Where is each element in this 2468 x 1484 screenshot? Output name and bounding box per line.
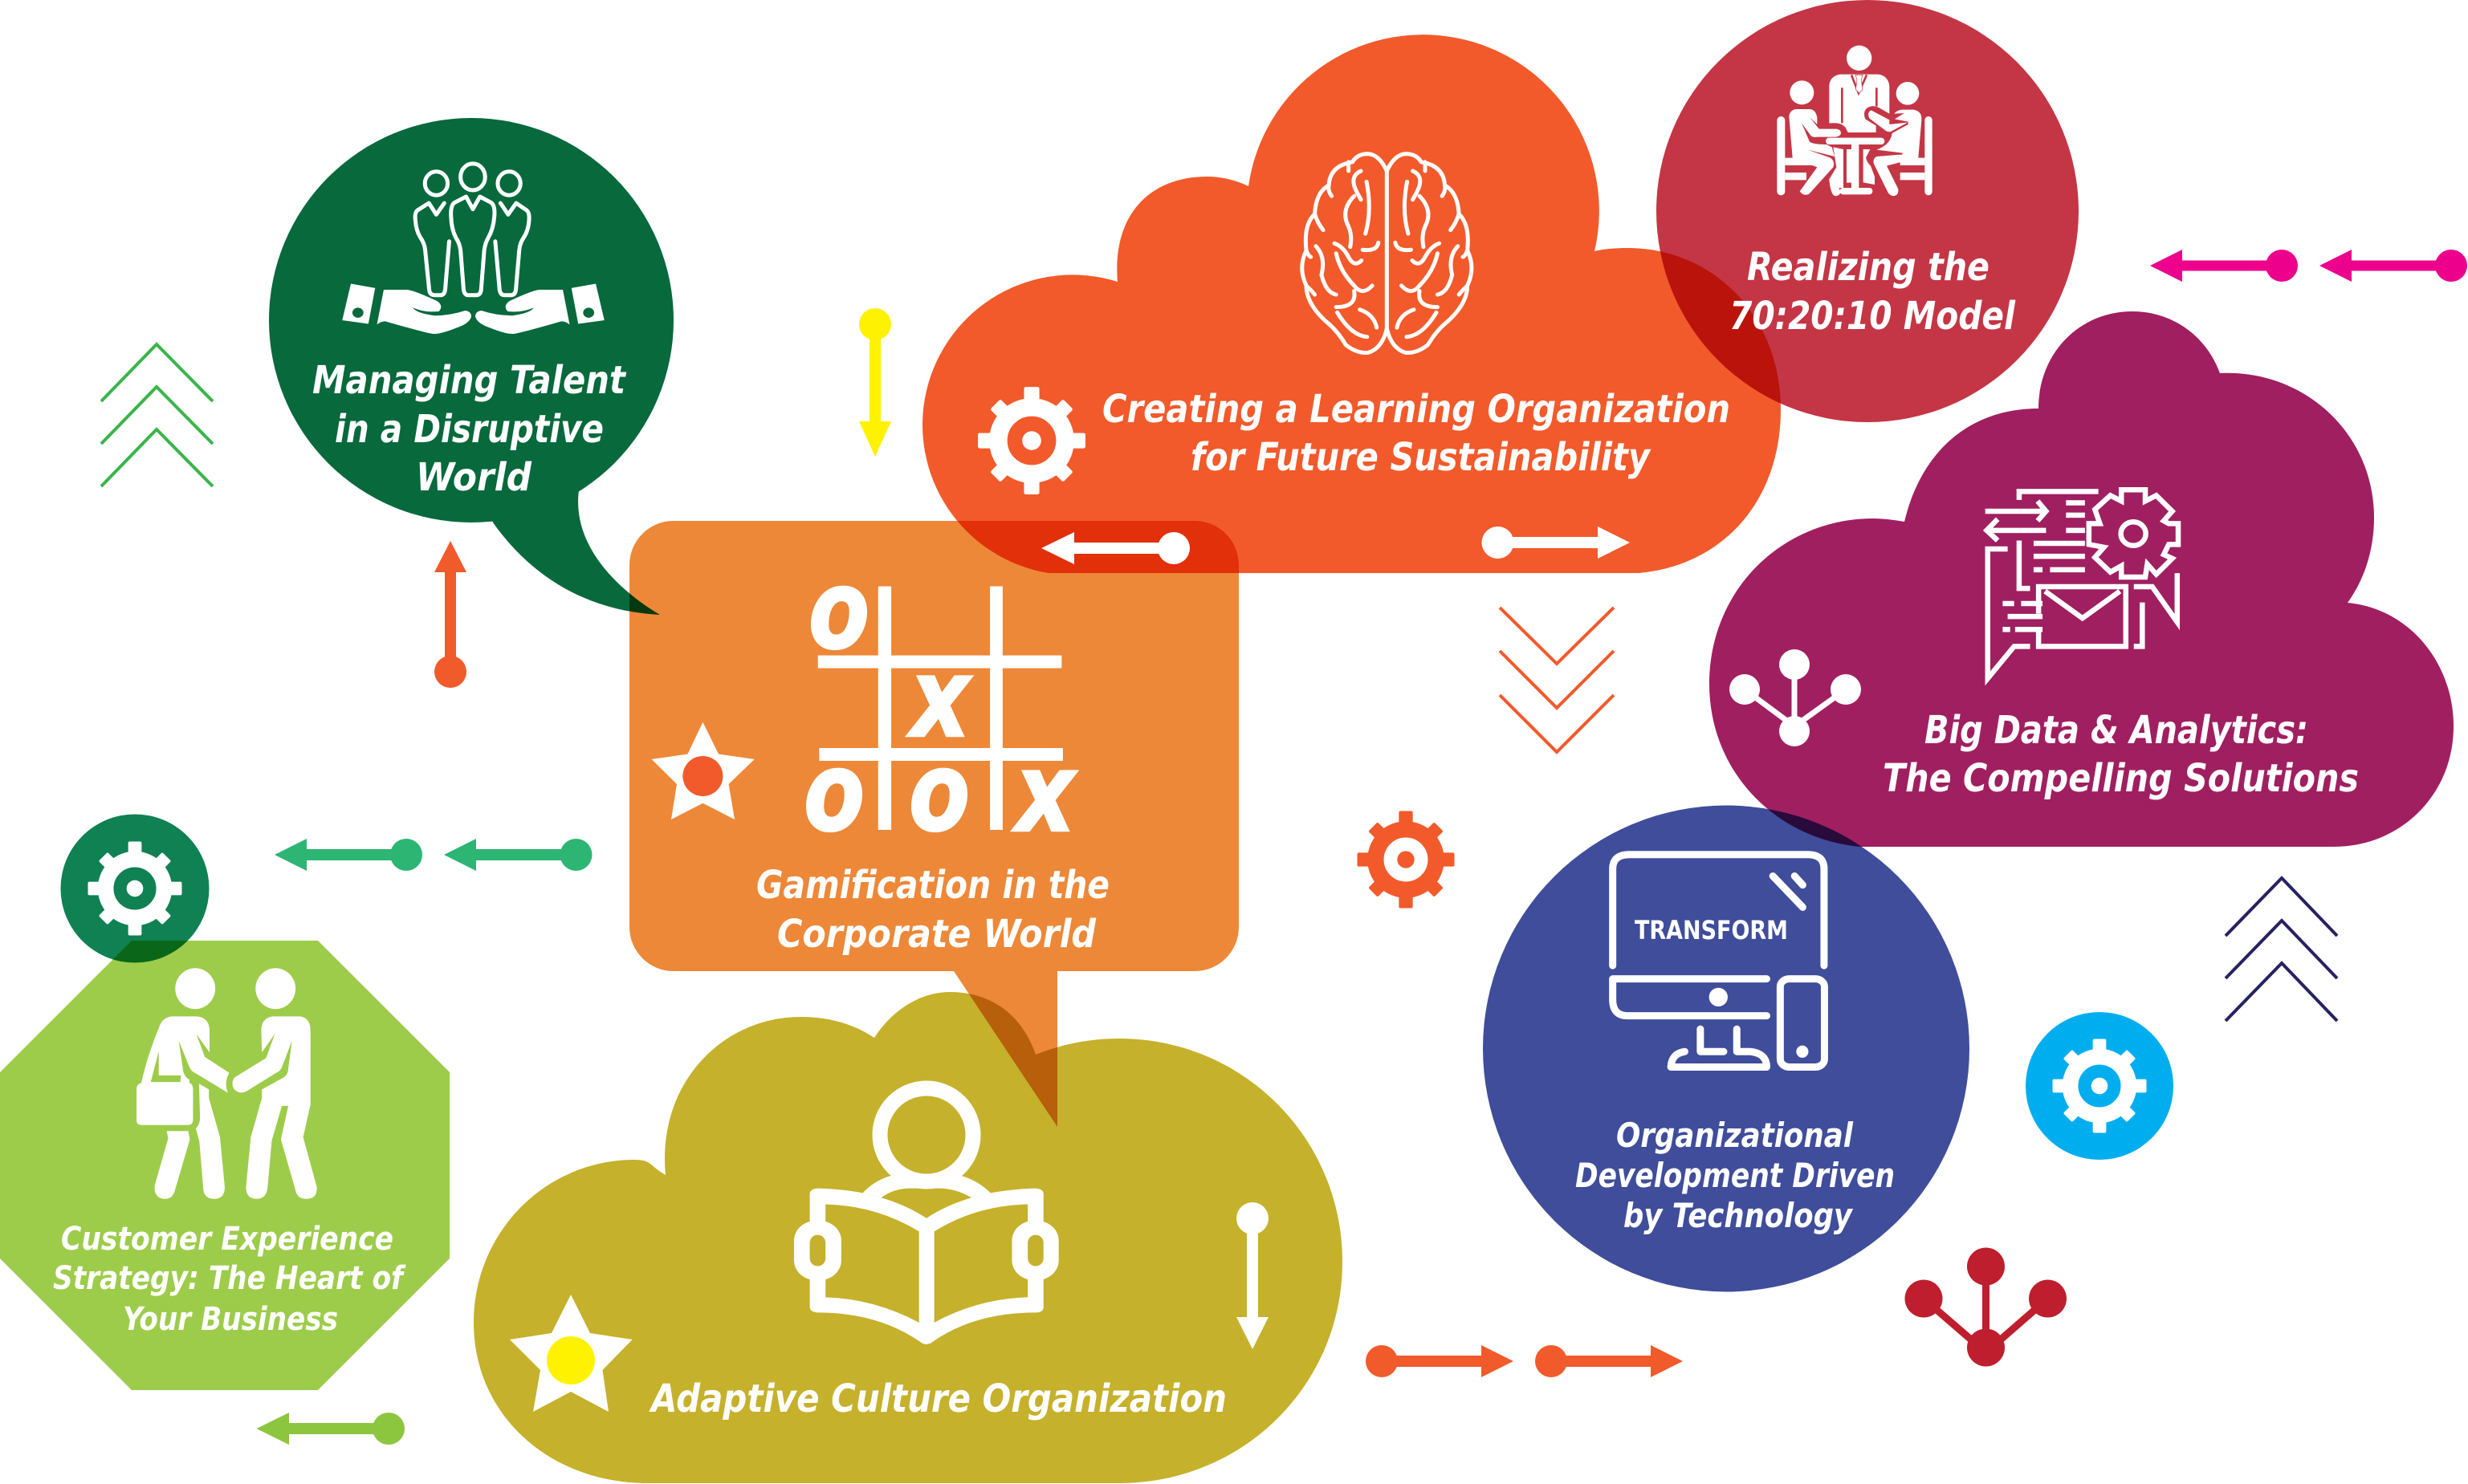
icon: data envelope gear: [1985, 490, 2178, 678]
icon: white network: [1729, 649, 1861, 746]
arrow: magenta left 1: [2150, 250, 2298, 282]
shape: purple cloud: [1709, 311, 2454, 847]
shape: orange speech box: [629, 521, 1239, 1127]
text: 70:20:10 heading: 70:20:10 Model: [1729, 294, 2015, 339]
text: managing talent heading: [312, 358, 627, 500]
shape: crimson circle: [1656, 0, 2079, 422]
icon: person reading book: [794, 1088, 1059, 1344]
text: technology heading: Organizational: [1616, 1116, 1854, 1155]
text: gamification heading: Corporate World: [777, 912, 1097, 957]
text: 70:20:10 heading: [1729, 245, 2015, 339]
chevrons: orange down: [1500, 608, 1614, 752]
text: big data heading: Big Data & Analytics:: [1924, 708, 2308, 753]
icon: gear on cyan circle: [2052, 1039, 2147, 1133]
text: customer experience heading: Your Business: [123, 1301, 338, 1338]
panel: technology: [1575, 855, 1895, 1235]
icon: orange gear: [1358, 811, 1454, 908]
panel: gamification: [652, 547, 1110, 957]
shape: orange cloud: [922, 35, 1781, 573]
shape: cyan gear circle: [2026, 1012, 2173, 1160]
text: gamification heading: [756, 863, 1110, 957]
shape: blue circle: [1483, 806, 1969, 1292]
shape: dark green gear circle: [61, 814, 209, 963]
icon: tic tac toe: [804, 547, 1078, 857]
text: gamification heading: Gamification in the: [756, 863, 1110, 908]
arrow: green left 2: [444, 839, 593, 871]
chevrons: navy up: [2226, 878, 2337, 1021]
icon: two people shaking hands: [136, 968, 317, 1199]
text: learning organization heading: Creating a Learning Organization: [1102, 387, 1730, 432]
icon: white gear: [978, 387, 1085, 494]
text: technology heading: Development Driven: [1575, 1156, 1895, 1195]
chevrons: green up: [101, 344, 213, 486]
text: learning organization heading: [1102, 387, 1730, 480]
shape: lime octagon: [0, 941, 450, 1390]
panel: customer experience: [53, 968, 406, 1338]
icon: monitor and phone: TRANSFORM: [1635, 915, 1788, 945]
panel: big data: [1729, 490, 2359, 801]
arrow: magenta left 2: [2319, 250, 2467, 282]
text: managing talent heading: Managing Talent: [312, 358, 627, 403]
icon: tic tac toe: o: [804, 730, 865, 856]
arrow: orange right 1: [1366, 1345, 1513, 1377]
text: learning organization heading: for Future Sustainability: [1191, 435, 1651, 480]
arrow: white right: [1482, 527, 1630, 559]
icon: monitor and phone: [1613, 855, 1824, 1067]
text: managing talent heading: in a Disruptive: [335, 407, 604, 452]
icon: tic tac toe: x: [906, 636, 973, 762]
icon: red network: [1904, 1247, 2067, 1366]
icon: tic tac toe: o: [909, 730, 970, 856]
arrow: white left: [1041, 532, 1190, 564]
icon: people held by hands: [342, 164, 605, 334]
shape: olive cloud: [474, 992, 1342, 1483]
text: customer experience heading: [53, 1221, 406, 1338]
icon: brain: [1302, 154, 1472, 352]
text: technology heading: [1575, 1116, 1895, 1235]
arrow: white down: [1236, 1202, 1269, 1349]
icon: gear on dark green circle: [88, 841, 182, 936]
arrow: green left 1: [275, 839, 422, 871]
shape: green speech bubble: [269, 118, 674, 615]
panel: adaptive culture: [510, 1088, 1269, 1421]
text: 70:20:10 heading: Realizing the: [1747, 245, 1989, 290]
icon: tic tac toe: o: [808, 547, 870, 674]
arrow: yellow down: [859, 308, 891, 457]
panel: learning organization: [978, 154, 1730, 564]
text: customer experience heading: Customer Experience: [61, 1221, 393, 1258]
arrow: orange up: [434, 541, 466, 688]
text: big data heading: [1883, 708, 2359, 801]
panel: 70:20:10 model: [1729, 46, 2015, 339]
panel: managing talent: [312, 164, 627, 500]
arrow: lime left: [257, 1413, 405, 1445]
text: technology heading: by Technology: [1623, 1196, 1853, 1235]
icon: tic tac toe: x: [1012, 730, 1078, 857]
text: big data heading: The Compelling Solutions: [1883, 756, 2359, 801]
icon: star with yellow dot: [510, 1295, 633, 1412]
text: managing talent heading: World: [416, 455, 532, 500]
arrow: orange right 2: [1535, 1345, 1683, 1377]
text: adaptive culture heading: Adaptive Culture Organization: [649, 1376, 1227, 1421]
icon: meeting at table: [1777, 46, 1932, 196]
icon: star with orange dot: [652, 722, 755, 819]
text: customer experience heading: Strategy: The Heart of: [53, 1260, 406, 1297]
